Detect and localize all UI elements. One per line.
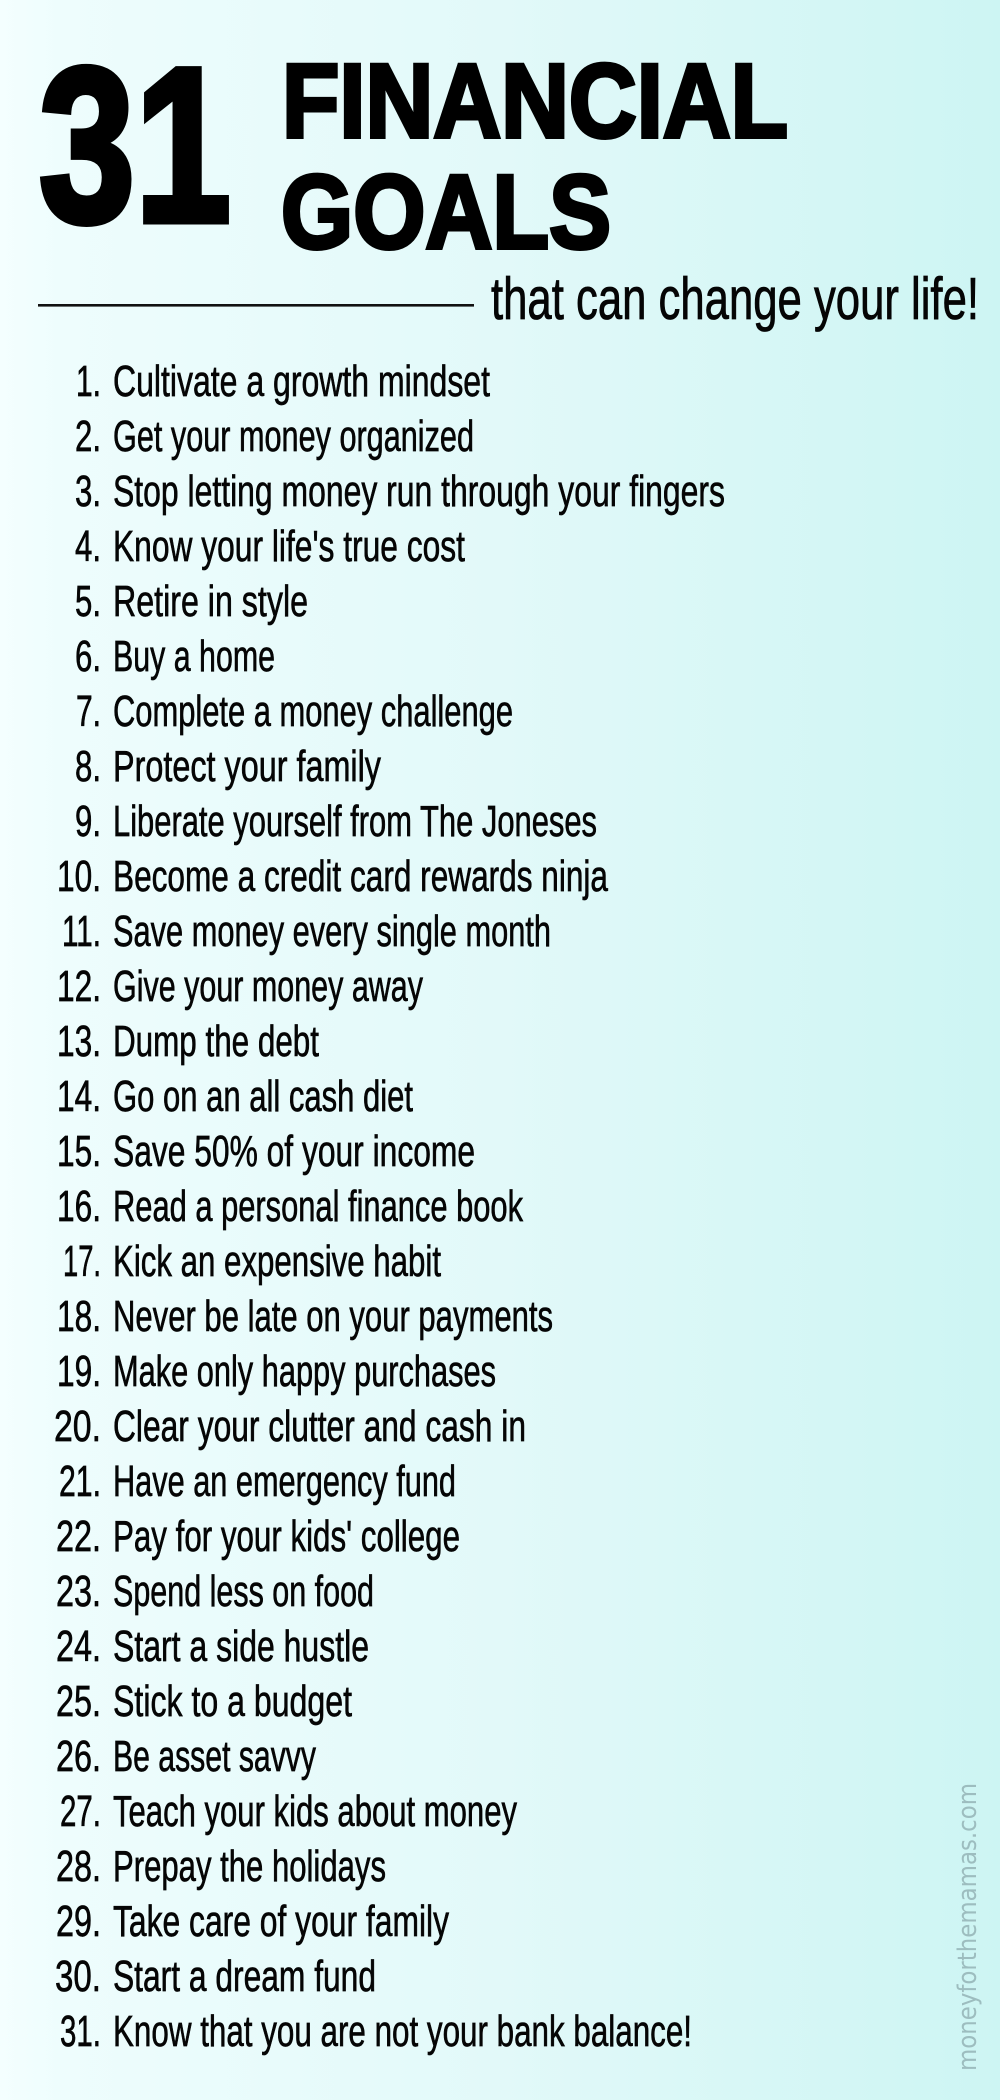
goal 19: Make only happy purchases [113,1348,496,1396]
goal 26 [56,1733,316,1781]
goal 29: Take care of your family [113,1898,449,1946]
goal 13: Dump the debt [113,1018,319,1066]
goal 28: Prepay the holidays [113,1843,386,1891]
goal 31: 31. [60,2008,101,2056]
goal 10: Become a credit card rewards ninja [113,853,609,901]
goal 22 [56,1513,460,1561]
goal 8: 8. [75,743,101,791]
goal 6: Buy a home [113,633,275,681]
goal 27: Teach your kids about money [113,1788,517,1836]
goal 4: 4. [75,523,101,571]
goal 31: Know that you are not your bank balance! [113,2008,692,2056]
goal 22: 22. [56,1513,101,1561]
goal 24: Start a side hustle [113,1623,369,1671]
goal 14 [57,1073,413,1121]
title [39,22,788,271]
goal 15 [57,1128,475,1176]
goal 6: 6. [75,633,101,681]
goal 14: 14. [57,1073,101,1121]
goal 1 [76,358,490,406]
numbered list of goals [54,358,725,2056]
title word FINANCIAL: FINANCIAL [282,43,788,160]
goal 18: Never be late on your payments [113,1293,553,1341]
goal 31 [60,2008,692,2056]
goal 27: 27. [60,1788,101,1836]
goal 17 [63,1238,441,1286]
goal 3: 3. [75,468,101,516]
goal 29: 29. [56,1898,101,1946]
goal 20: 20. [54,1403,101,1451]
goal 7: 7. [76,688,101,736]
goal 15: 15. [57,1128,101,1176]
goal 11 [62,908,551,956]
goal 22: Pay for your kids' college [113,1513,460,1561]
goal 14: Go on an all cash diet [113,1073,413,1121]
watermark: website name: moneyforthemamas.com [953,1783,983,2071]
goal 2: Get your money organized [113,413,474,461]
goal 24 [56,1623,369,1671]
goal 25: 25. [56,1678,101,1726]
goal 18: 18. [57,1293,101,1341]
goal 1: Cultivate a growth mindset [113,358,490,406]
goal 18 [57,1293,553,1341]
goal 30 [55,1953,376,2001]
goal 30: Start a dream fund [113,1953,376,2001]
goal 5 [75,578,308,626]
goal 12 [57,963,423,1011]
goal 6 [75,633,275,681]
goal 8: Protect your family [113,743,381,791]
goal 9: Liberate yourself from The Joneses [113,798,597,846]
goal 17: Kick an expensive habit [113,1238,441,1286]
goal 10: 10. [57,853,101,901]
goal 19: 19. [57,1348,101,1396]
goal 20: Clear your clutter and cash in [113,1403,526,1451]
goal 23: Spend less on food [113,1568,374,1616]
goal 4 [75,523,465,571]
goal 24: 24. [56,1623,101,1671]
goal 8 [75,743,381,791]
goal 5: 5. [75,578,101,626]
goal 9 [75,798,597,846]
goal 2: 2. [75,413,101,461]
goal 15: Save 50% of your income [113,1128,475,1176]
title word GOALS: GOALS [281,154,611,271]
goal 12: 12. [57,963,101,1011]
goal 21 [59,1458,456,1506]
goal 7 [76,688,513,736]
goal 13: 13. [57,1018,101,1066]
goal 1: 1. [76,358,101,406]
goal 11: 11. [62,908,101,956]
goal 5: Retire in style [113,578,308,626]
goal 30: 30. [55,1953,101,2001]
goal 21: Have an emergency fund [113,1458,456,1506]
goal 29 [56,1898,449,1946]
subtitle rule [38,304,474,307]
goal 3: Stop letting money run through your fingers [113,468,725,516]
goal 12: Give your money away [113,963,423,1011]
goal 25 [56,1678,352,1726]
goal 7: Complete a money challenge [113,688,513,736]
goal 11: Save money every single month [113,908,551,956]
goal 21: 21. [59,1458,101,1506]
goal 19 [57,1348,496,1396]
goal 26: Be asset savvy [113,1733,316,1781]
goal 28: 28. [56,1843,101,1891]
goal 2 [75,413,474,461]
goal 13 [57,1018,319,1066]
goal 25: Stick to a budget [113,1678,352,1726]
goal 10 [57,853,609,901]
goal 23 [56,1568,374,1616]
goal 4: Know your life's true cost [113,523,465,571]
goal 27 [60,1788,517,1836]
title number 31: 31 [39,22,231,268]
goal 16: 16. [57,1183,101,1231]
goal 9: 9. [75,798,101,846]
goal 28 [56,1843,386,1891]
goal 17: 17. [63,1238,101,1286]
goal 20 [54,1403,526,1451]
goal 23: 23. [56,1568,101,1616]
goal 26: 26. [56,1733,101,1781]
goal 16: Read a personal finance book [113,1183,523,1231]
goal 16 [57,1183,523,1231]
